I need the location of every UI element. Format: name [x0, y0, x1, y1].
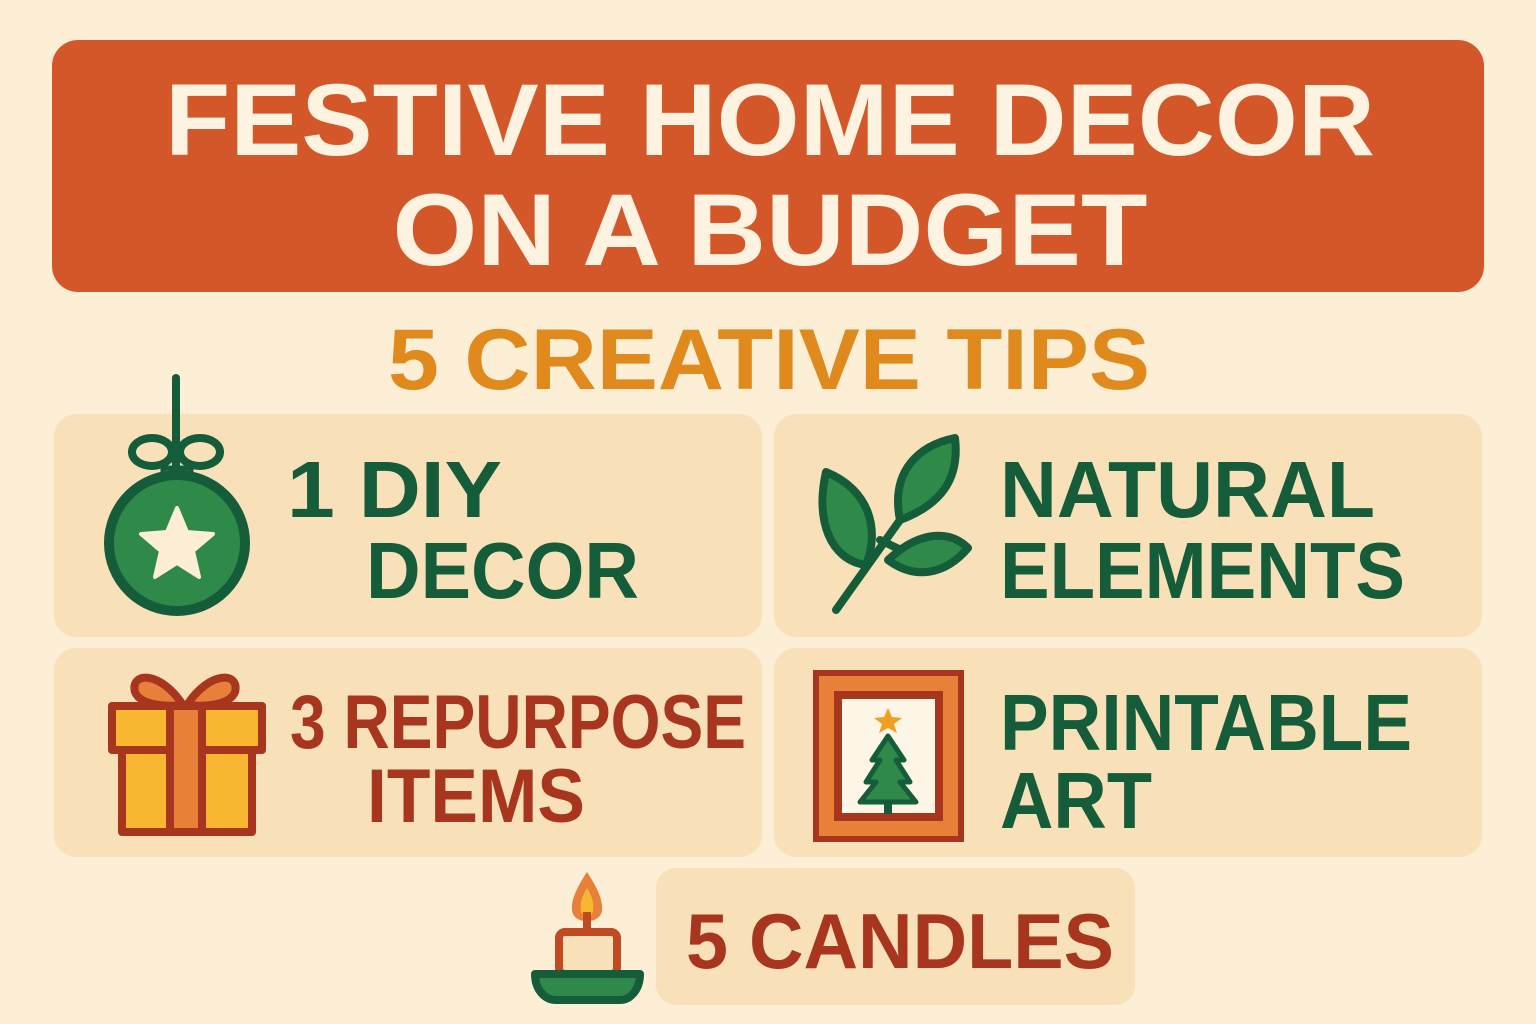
- title banner: ON A BUDGET: [392, 173, 1148, 287]
- heading: 3 repurpose items: [290, 680, 746, 839]
- icon: leaves: [822, 438, 968, 610]
- heading: 3 repurpose items: ITEMS: [367, 754, 585, 839]
- title banner: FESTIVE HOME DECOR: [165, 63, 1375, 177]
- icon: ornament: [109, 378, 245, 611]
- panel: repurpose items: [54, 648, 762, 857]
- icon: candle: [535, 872, 640, 1000]
- heading: natural elements: [1000, 445, 1405, 615]
- heading: 3 repurpose items: 3 REPURPOSE: [290, 680, 746, 765]
- heading: printable art: ART: [1000, 756, 1152, 845]
- heading: 1 DIY DECOR: [287, 445, 639, 615]
- panel: printable art: [774, 648, 1482, 857]
- heading: natural elements: ELEMENTS: [1000, 526, 1405, 615]
- heading: 1 DIY DECOR: DECOR: [366, 526, 639, 615]
- title banner: [52, 40, 1484, 292]
- heading: printable art: [1000, 678, 1412, 845]
- subtitle: 5 CREATIVE TIPS: [388, 312, 1150, 408]
- heading: natural elements: NATURAL: [1000, 445, 1375, 534]
- panel: candles: [656, 868, 1135, 1005]
- heading: 1 DIY DECOR: 1 DIY: [287, 445, 502, 534]
- icon: gift: [112, 678, 262, 832]
- heading: printable art: PRINTABLE: [1000, 678, 1412, 767]
- icon: framed tree: [816, 673, 961, 839]
- panel: natural elements: [774, 414, 1482, 637]
- panel: candles: 5 CANDLES: [686, 897, 1114, 985]
- panel: DIY decor: [54, 378, 762, 637]
